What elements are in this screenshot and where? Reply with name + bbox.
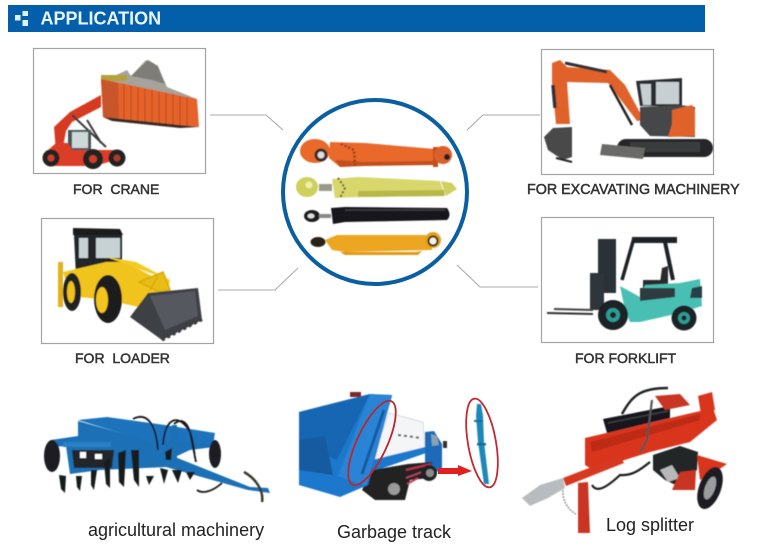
panel: forklift	[542, 218, 714, 342]
header bar	[8, 5, 705, 32]
icon: blue cylinder	[474, 404, 489, 484]
icon: truck highlight oval	[339, 395, 405, 491]
icon: amber cylinder	[310, 232, 441, 255]
connector: crane	[210, 115, 283, 130]
label: log splitter: Log splitter	[606, 515, 694, 535]
panel: central cylinders circle	[283, 100, 467, 284]
label: for loader: FOR LOADER	[75, 350, 170, 366]
panel: excavator	[542, 50, 714, 174]
label: agricultural machinery: agricultural machinery	[88, 520, 264, 540]
icon: black cylinder	[304, 207, 450, 224]
label: for excavating machinery: FOR EXCAVATING MACHINERY	[527, 182, 740, 198]
connector: loader	[218, 268, 298, 290]
icon: disc harrow	[44, 417, 270, 502]
panel: agricultural machinery	[44, 417, 270, 540]
label: for forklift: FOR FORKLIFT	[575, 350, 677, 366]
panel: garbage truck	[299, 392, 504, 542]
panel: log splitter	[522, 388, 728, 535]
icon: garbage truck	[299, 392, 447, 500]
icon: orange cylinder	[300, 139, 452, 167]
panel: loader	[42, 218, 214, 344]
label: garbage track: Garbage track	[337, 522, 452, 542]
connector: excavator	[467, 115, 540, 130]
icon: yellow-green cylinder	[296, 177, 457, 198]
label: for crane: FOR CRANE	[73, 181, 159, 197]
icon: backhoe loader	[58, 228, 203, 340]
arrow: truck to cylinder	[438, 465, 472, 476]
icon: log splitter	[522, 388, 728, 533]
header bar: APPLICATION	[40, 8, 161, 28]
icon: cylinder highlight oval	[460, 396, 504, 490]
icon: excavator	[544, 60, 713, 162]
panel: crane	[34, 48, 206, 174]
connector: forklift	[457, 265, 538, 287]
icon: forklift	[547, 237, 702, 330]
icon: reach stacker crane	[42, 60, 199, 169]
